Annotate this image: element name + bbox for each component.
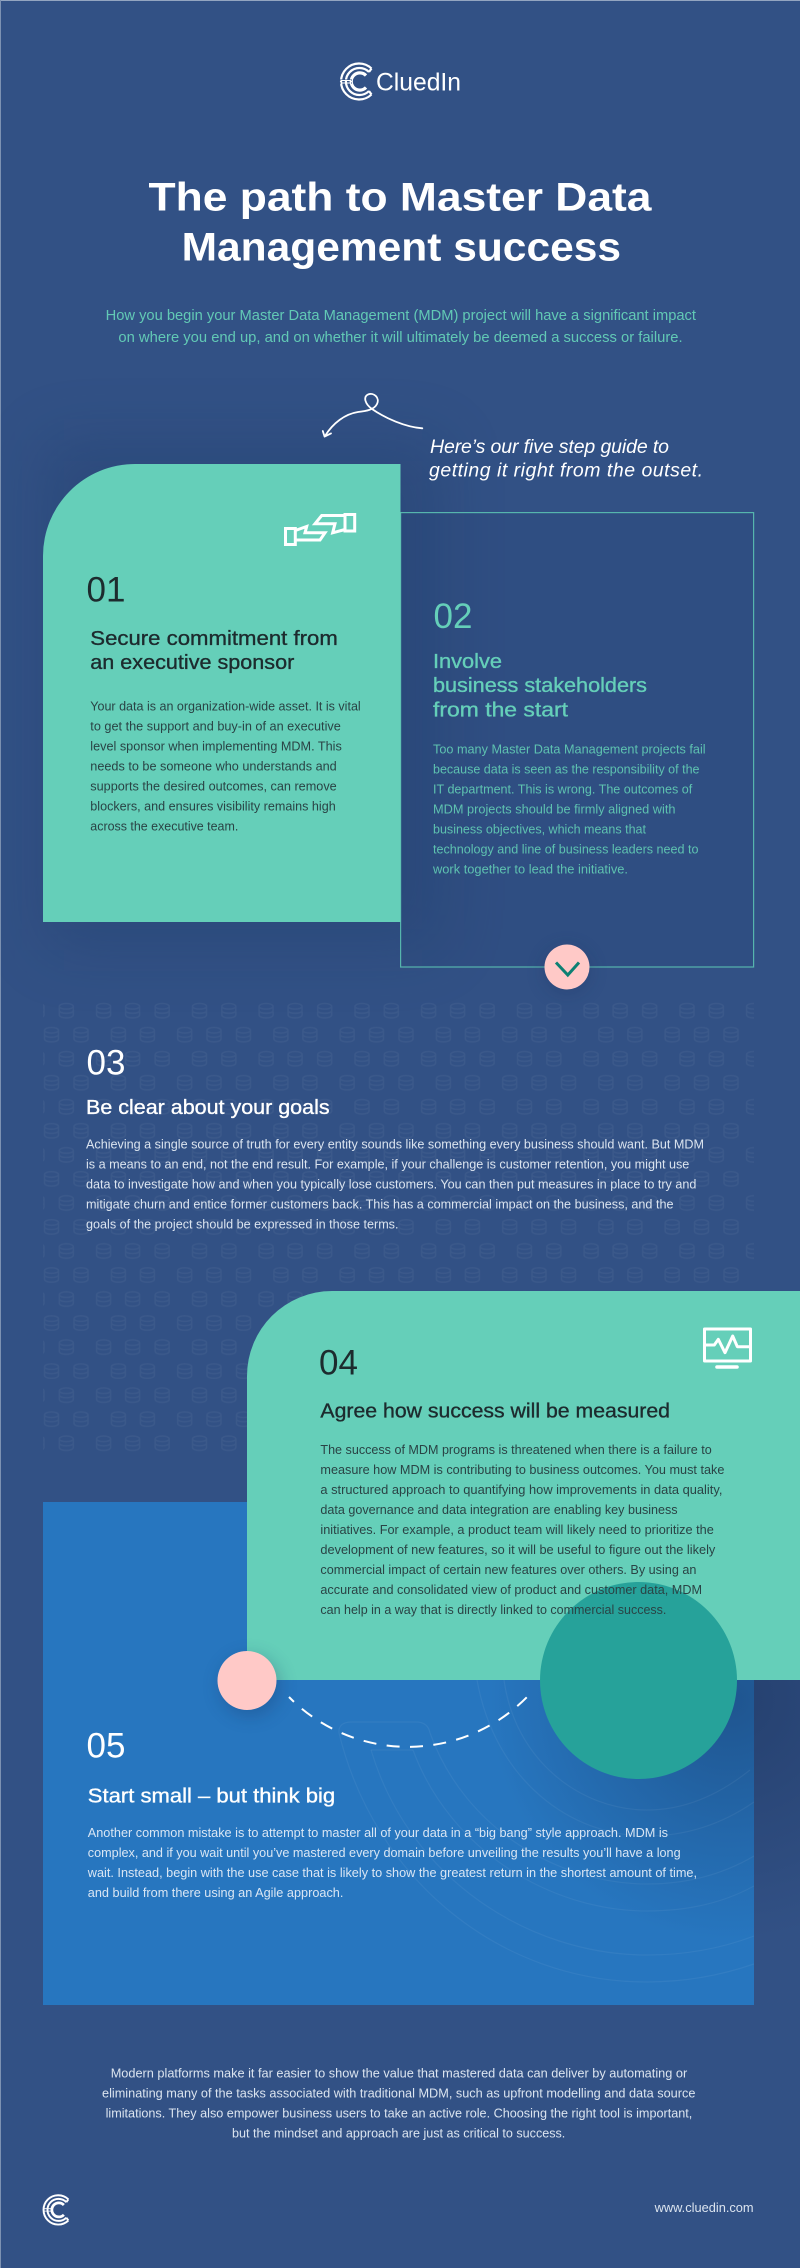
step 3 number: 03 [86,1044,125,1083]
closing paragraph: but the mindset and approach are just as critical to success. [232,2125,565,2140]
step 1 body text: blockers, and ensures visibility remains high [90,799,336,814]
panel: step 1 card [43,464,400,922]
step 2 body text: Too many Master Data Management projects fail [433,742,706,756]
logo: CluedIn: CluedIn [376,69,461,97]
shadow near big circle [300,1450,800,1950]
title: The path to Master Data [148,176,652,220]
step 3 heading: Be clear about your goals [86,1096,330,1119]
arrow: hand-drawn loop [323,394,422,437]
subtitle intro text [106,308,696,346]
step 5 body text: wait. Instead, begin with the use case that is likely to show the greatest return in the shortest amount of time, [87,1865,697,1880]
step 1 body text [90,699,361,834]
step 3 body text: is a means to an end, not the end result. For example, if your challenge is customer retention, you might use [86,1157,689,1172]
closing paragraph [102,2065,695,2140]
step 2 heading: Involve [433,650,502,673]
step 4 body text: data governance and data integration are enabling key business [320,1502,678,1517]
step 4 number: 04 [319,1344,358,1383]
step 3 body text: data to investigate how and when you typically lose customers. You can then put measures in place to try and [86,1177,696,1192]
handwritten note: getting it right from the outset. [429,460,703,482]
step 1 body text: needs to be someone who understands and [90,759,337,774]
step 4 body text: commercial impact of certain new features over others. By using an [320,1562,696,1577]
background pattern: database icons [43,1000,754,1456]
step 2 body text: technology and line of business leaders need to [433,842,698,856]
card shadow [43,440,443,950]
step 5 heading: Start small – but think big [88,1785,335,1808]
step 1 heading: Secure commitment from [90,627,338,650]
step 2 number: 02 [434,597,472,636]
footer url: www.cluedin.com [654,2200,754,2215]
step 3 body text [86,1137,704,1232]
pink circle [218,1651,280,1716]
step 4 body text [320,1442,724,1617]
step 1 heading [90,627,338,674]
step 2 body text: business objectives, which means that [433,822,646,836]
step 5 body text: complex, and if you wait until you’ve mastered every domain before unveiling the results you’ll have a long [88,1845,681,1860]
title [148,176,652,270]
footer logo mark [44,2195,68,2225]
step 3 body text: Achieving a single source of truth for every entity sounds like something every business should want. But MDM [86,1137,704,1152]
handwritten note: Here’s our five step guide to [430,436,669,458]
panel: step 5 card [43,1502,754,2005]
icon: monitor with pulse [704,1329,750,1367]
step 1 body text: to get the support and buy-in of an executive [90,719,341,734]
step 5 body text: and build from there using an Agile approach. [88,1885,343,1900]
closing paragraph: limitations. They also empower business users to take an active role. Choosing the right tool is important, [106,2105,692,2120]
panel: step 2 outlined box [401,513,754,967]
step 2 body text [432,742,706,876]
step 2 heading: business stakeholders [433,674,647,697]
step 2 body text: IT department. This is wrong. The outcomes of [433,782,693,796]
step 1 body text: across the executive team. [90,819,238,834]
section: step 3 [86,1044,704,1232]
step 4 body text: measure how MDM is contributing to business outcomes. You must take [320,1462,724,1477]
closing paragraph: Modern platforms make it far easier to show the value that mastered data can deliver by automating or [111,2065,688,2080]
step 2 body text: because data is seen as the responsibility of the [433,762,700,776]
step 2 body text: MDM projects should be firmly aligned with [433,802,676,816]
icon: handshake [286,514,355,544]
step 4 content [319,1329,750,1617]
step 2 heading [433,650,647,722]
title: Management success [182,226,621,270]
step 1 body text: Your data is an organization-wide asset. It is vital [90,699,361,714]
subtitle intro text: How you begin your Master Data Management (MDM) project will have a significant impact [106,308,696,324]
dashed connector arc [289,1697,527,1747]
step 5 body text [87,1825,697,1900]
subtitle intro text: on where you end up, and on whether it will ultimately be deemed a success or failure. [118,330,683,346]
step 2 heading: from the start [433,699,568,722]
step 1 heading: an executive sponsor [90,651,294,674]
step 1 body text: supports the desired outcomes, can remove [90,779,337,794]
step 4 body text: The success of MDM programs is threatened when there is a failure to [320,1442,712,1457]
step 4 heading: Agree how success will be measured [320,1399,670,1422]
step 3 body text: mitigate churn and entice former customers back. This has a commercial impact on the business, and the [86,1197,674,1212]
step 1 number: 01 [86,571,125,610]
handwritten note [429,436,703,482]
step 5 number: 05 [86,1727,125,1766]
big teal circle [540,1582,737,1779]
step 4 body text: accurate and consolidated view of product and customer data, MDM [320,1582,702,1597]
step 4 body text: can help in a way that is directly linked to commercial success. [320,1602,666,1617]
step 4 body text: a structured approach to quantifying how improvements in data quality, [320,1482,722,1497]
closing paragraph: eliminating many of the tasks associated with traditional MDM, such as upfront modelling and data source [102,2085,695,2100]
logo: CluedIn [340,63,461,100]
step 5 content [86,1727,697,1900]
step 1 body text: level sponsor when implementing MDM. This [90,739,342,754]
step 2 body text: work together to lead the initiative. [432,862,628,876]
step 3 body text: goals of the project should be expressed in those terms. [86,1217,398,1232]
step 4 body text: development of new features, so it will be useful to figure out the likely [320,1542,716,1557]
step 5 body text: Another common mistake is to attempt to master all of your data in a “big bang” style approach. MDM is [88,1825,668,1840]
decorative rings [339,1680,754,1982]
pink chevron button [544,944,590,994]
panel: step 4 card [247,1291,800,1680]
step 4 body text: initiatives. For example, a product team will likely need to prioritize the [320,1522,714,1537]
